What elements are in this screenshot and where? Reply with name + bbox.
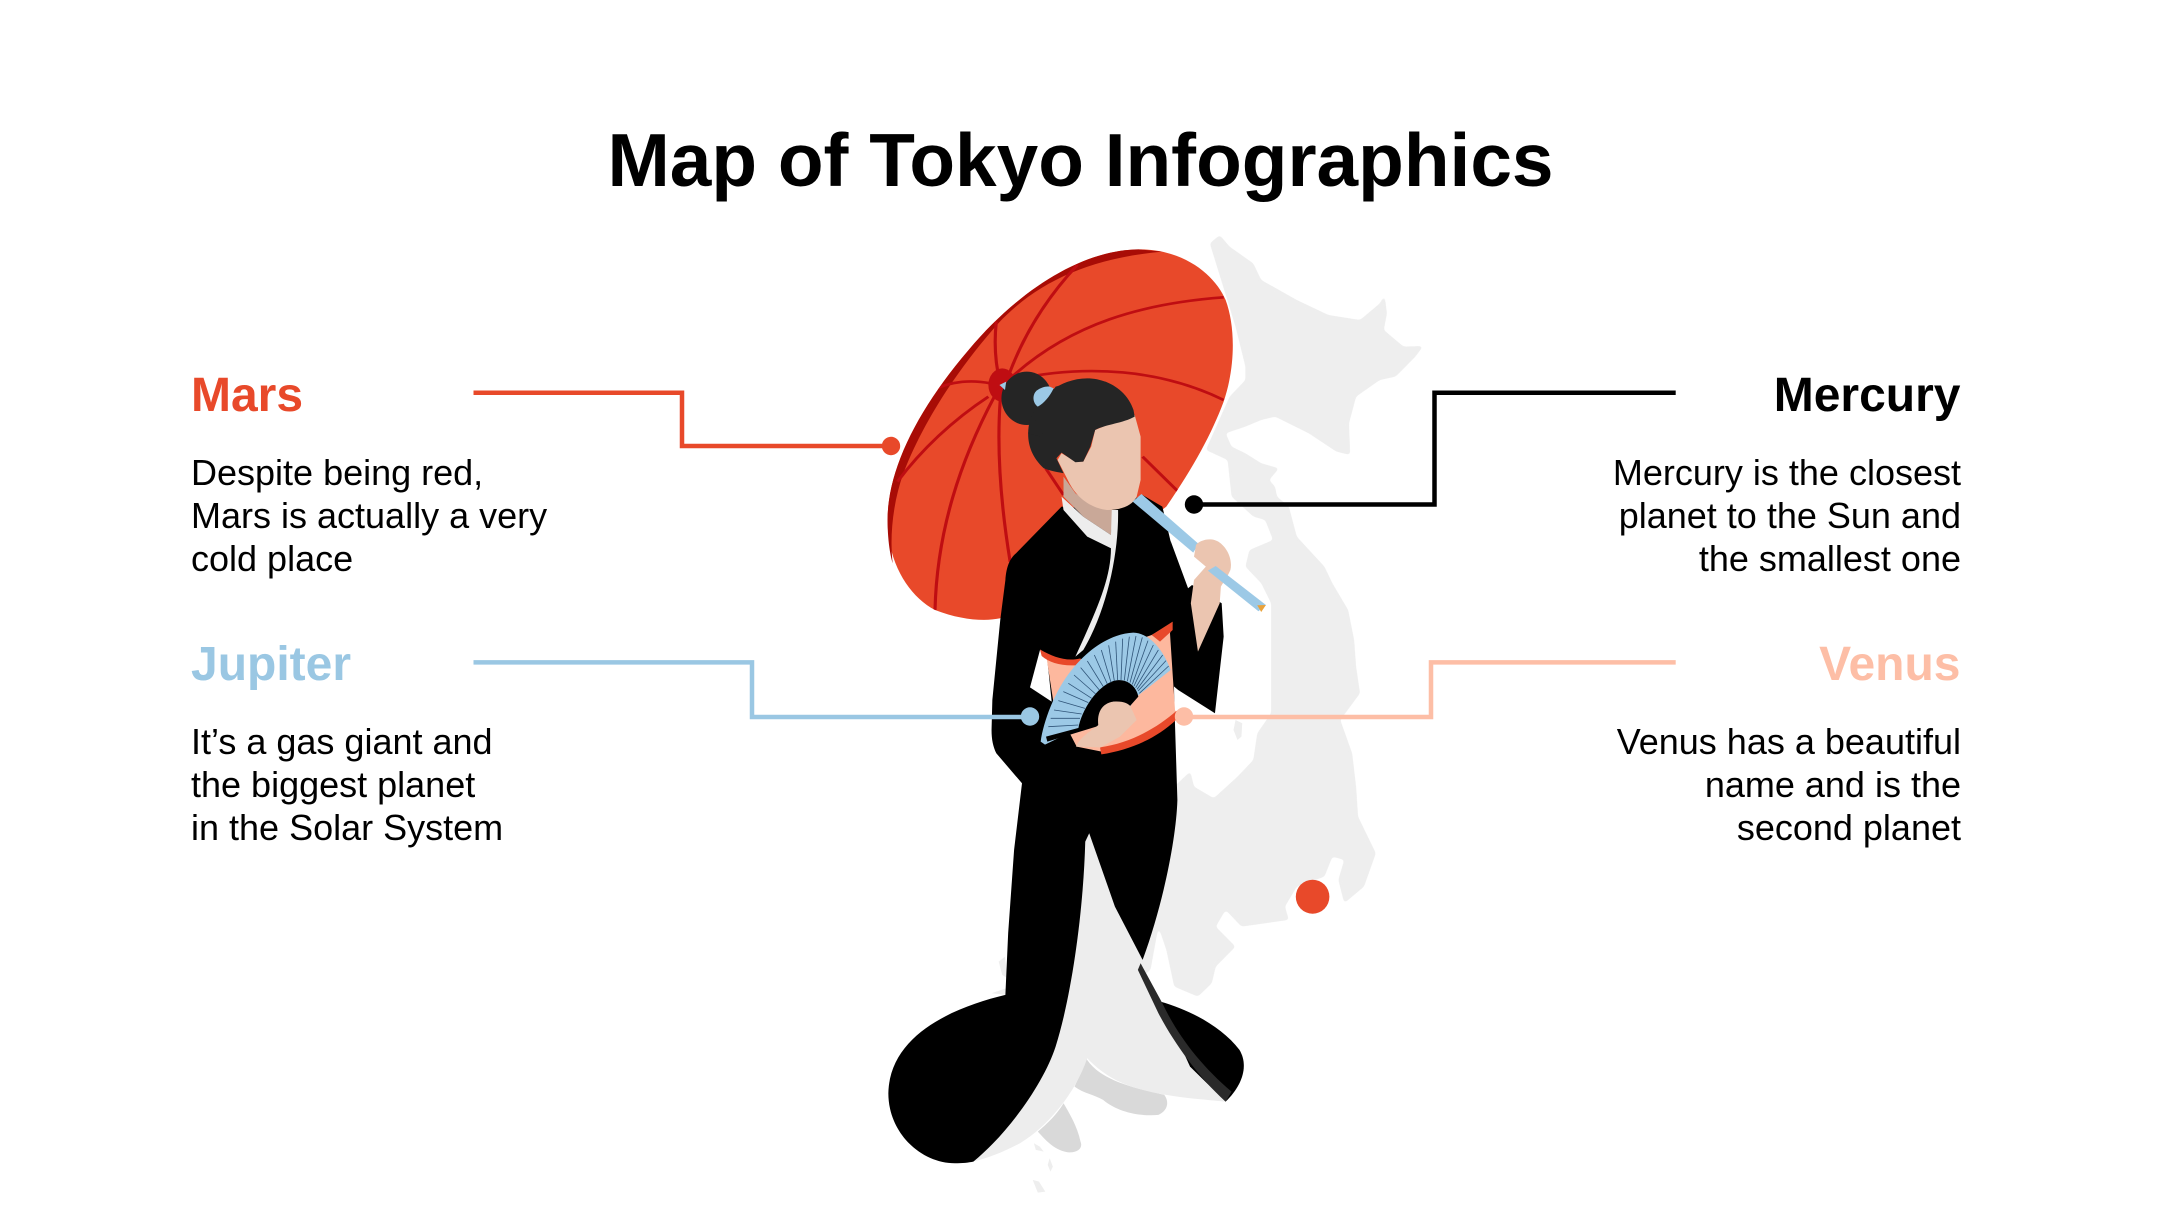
text block: Jupiter: [191, 638, 503, 848]
obi sash: [1040, 622, 1177, 754]
connector: Mars: [474, 393, 900, 455]
black kimono: [888, 495, 1244, 1163]
icon: hand holding fan: [1076, 702, 1137, 747]
text block: Mars: cold place: [191, 538, 353, 579]
icon: parasol handle and raised hand: [1133, 494, 1266, 652]
map of Japan: [992, 235, 1423, 1193]
text block: Venus: Venus has a beautiful: [1617, 721, 1961, 762]
text block: Jupiter: the biggest planet: [191, 764, 475, 805]
text block: Jupiter: Jupiter: [191, 638, 351, 691]
icon: folding fan: [1041, 633, 1171, 745]
connector: Venus: [1175, 662, 1676, 726]
text block: Venus: second planet: [1737, 807, 1961, 848]
text block: Mars: Despite being red,: [191, 452, 483, 493]
text block: Mars: Mars: [191, 369, 303, 422]
text block: Mars: Mars is actually a very: [191, 495, 547, 536]
text block: Venus: name and is the: [1705, 764, 1961, 805]
text block: Mercury: [1613, 369, 1961, 579]
kimono gray feet shadow: [1038, 1057, 1167, 1152]
icon: hair and bun: [999, 372, 1052, 425]
kimono dark edge: [1138, 963, 1232, 1102]
geisha figure with umbrella: [888, 249, 1266, 1163]
obi sash, fan and hand: [1030, 622, 1177, 754]
text block: Venus: Venus: [1819, 638, 1960, 691]
kimono white lining: [973, 833, 1226, 1162]
white gap in sleeve: [1030, 650, 1052, 702]
connector: Jupiter: [474, 662, 1039, 726]
text block: Mercury: Mercury is the closest: [1613, 452, 1961, 493]
text block: Jupiter: in the Solar System: [191, 807, 503, 848]
title: Map of Tokyo Infographics: [607, 118, 1554, 202]
text block: Mars: [191, 369, 547, 579]
text block: Mercury: planet to the Sun and: [1619, 495, 1961, 536]
text block: Mercury: Mercury: [1774, 369, 1961, 422]
text block: Jupiter: It’s a gas giant and: [191, 721, 493, 762]
icon: face and hair front: [1028, 378, 1141, 510]
Tokyo location marker: [1296, 880, 1329, 914]
icon: red umbrella: [888, 249, 1233, 620]
text block: Venus: [1617, 638, 1961, 848]
connector: Mercury: [1185, 393, 1676, 514]
text block: Mercury: the smallest one: [1699, 538, 1961, 579]
neck and collar: [1062, 477, 1118, 657]
